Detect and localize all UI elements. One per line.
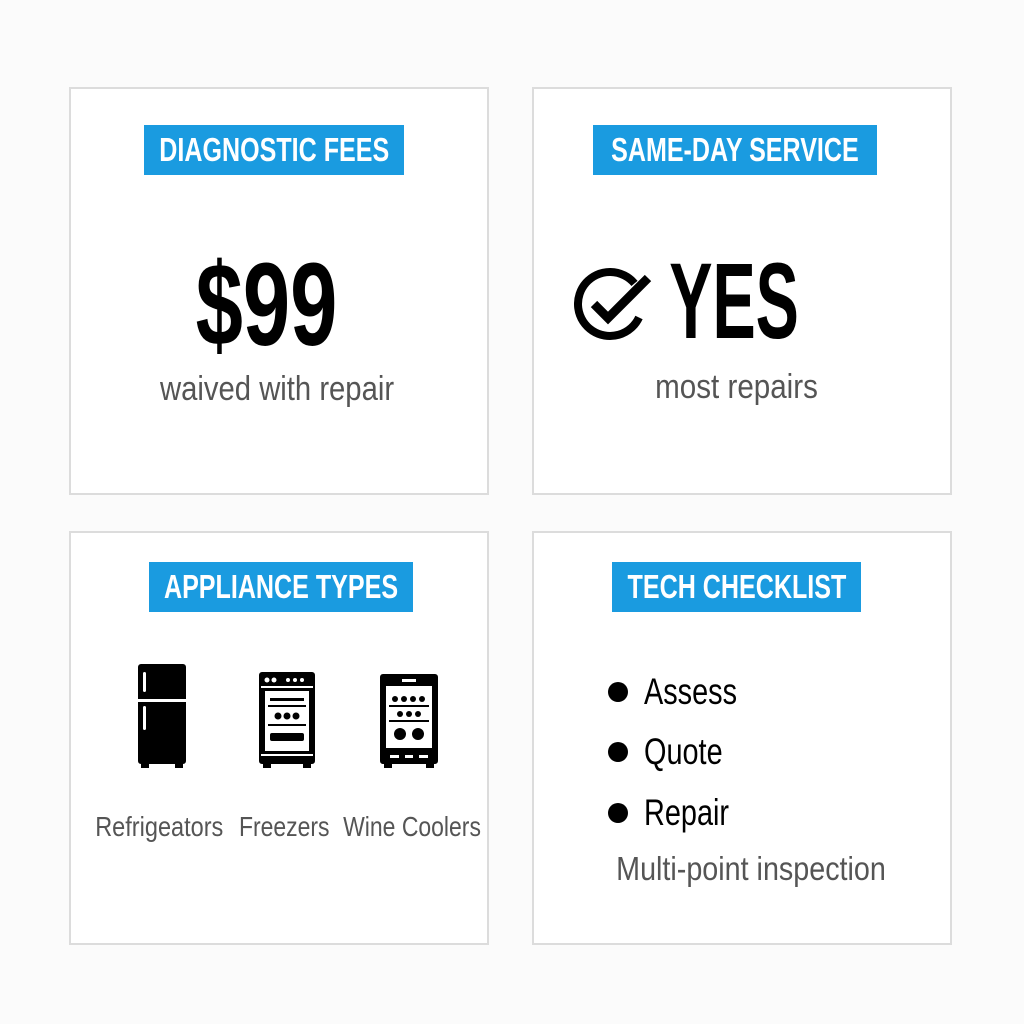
panel: appliance types — [69, 531, 489, 945]
price: $99 — [195, 239, 337, 371]
item: assess: Assess — [644, 671, 737, 712]
text: most repairs: most repairs — [656, 368, 818, 406]
item: repair: Repair — [644, 792, 729, 833]
label: tech checklist — [612, 562, 861, 612]
label: same-day — [593, 125, 877, 175]
label: appliance types: APPLIANCE TYPES — [164, 568, 398, 605]
label: diagnostic fees: DIAGNOSTIC FEES — [159, 131, 389, 168]
label: diagnostic fees — [144, 125, 404, 175]
panel: tech checklist — [532, 531, 952, 945]
icon: fridge — [138, 664, 186, 768]
icon: check circle — [574, 268, 652, 340]
panel: diagnostic fees — [69, 87, 489, 495]
text: refrigerators: Refrigeators — [95, 811, 223, 842]
checklist — [608, 671, 737, 833]
label: same-day: SAME-DAY SERVICE — [611, 131, 859, 168]
label: tech checklist: TECH CHECKLIST — [627, 568, 846, 605]
label: appliance types — [149, 562, 413, 612]
yes: YES — [669, 240, 799, 361]
text: freezers: Freezers — [239, 811, 329, 842]
item: quote — [608, 731, 723, 772]
text: waived: waived with repair — [160, 370, 394, 408]
item: quote: Quote — [644, 731, 723, 772]
icon: wine cooler — [380, 674, 438, 768]
icon: freezer — [259, 672, 315, 768]
panel: same-day service — [532, 87, 952, 495]
text: multi-point: Multi-point inspection — [616, 850, 886, 887]
text: wine coolers: Wine Coolers — [343, 811, 481, 842]
